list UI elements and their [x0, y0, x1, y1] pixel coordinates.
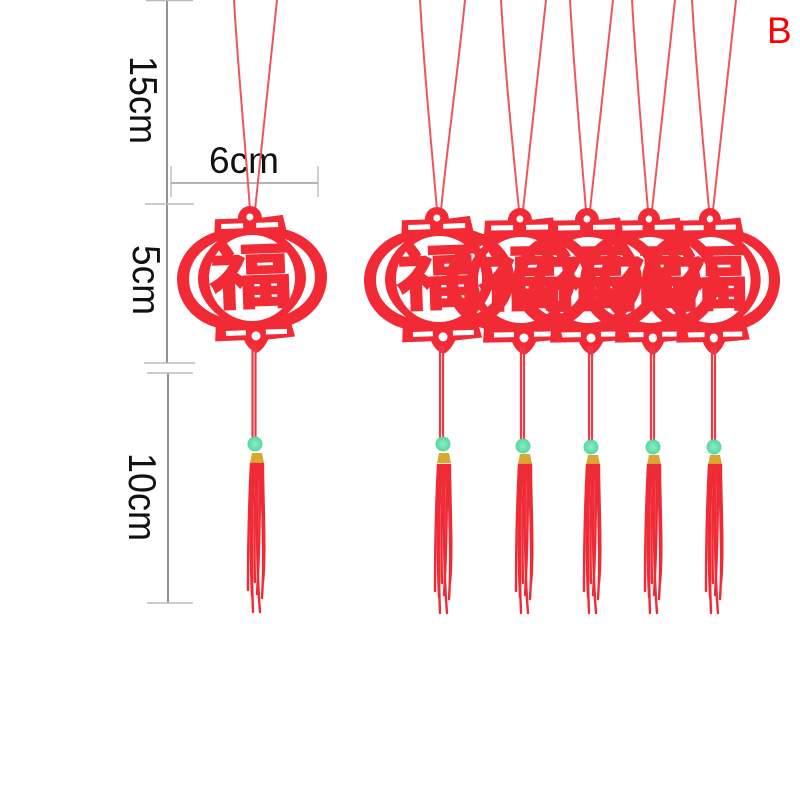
dimension lines — [144, 0, 318, 603]
lantern 3: 福 — [545, 241, 629, 320]
label: 15cm: 15cm — [122, 56, 165, 144]
lantern 1: 福 — [396, 239, 480, 320]
beads — [436, 436, 722, 454]
label: 10cm: 10cm — [121, 453, 164, 541]
hanging strings — [420, 0, 736, 210]
lantern 3 — [512, 207, 664, 356]
tassel — [248, 464, 264, 612]
lantern 2 — [445, 207, 597, 356]
lantern 4 — [579, 207, 721, 356]
hanging strings — [234, 0, 277, 210]
bead — [248, 436, 262, 452]
label: 6cm: 6cm — [209, 140, 279, 181]
gold cap — [250, 453, 264, 463]
tassels — [435, 465, 722, 613]
group of five overlapping lanterns — [362, 0, 781, 613]
lantern body with fu character: 福 — [209, 238, 293, 319]
cord — [252, 345, 256, 438]
lantern body with fu character — [175, 203, 330, 356]
lantern 2: 福 — [478, 241, 562, 320]
single lantern with measurements — [175, 0, 330, 612]
gold caps — [437, 453, 722, 465]
lantern 1 — [362, 204, 517, 357]
lantern 4: 福 — [610, 240, 688, 320]
lantern 5: 福 — [672, 241, 749, 320]
cords — [440, 346, 715, 441]
label: variant B: B — [767, 10, 792, 51]
label: 5cm: 5cm — [124, 245, 167, 315]
lantern 5 — [641, 207, 781, 356]
